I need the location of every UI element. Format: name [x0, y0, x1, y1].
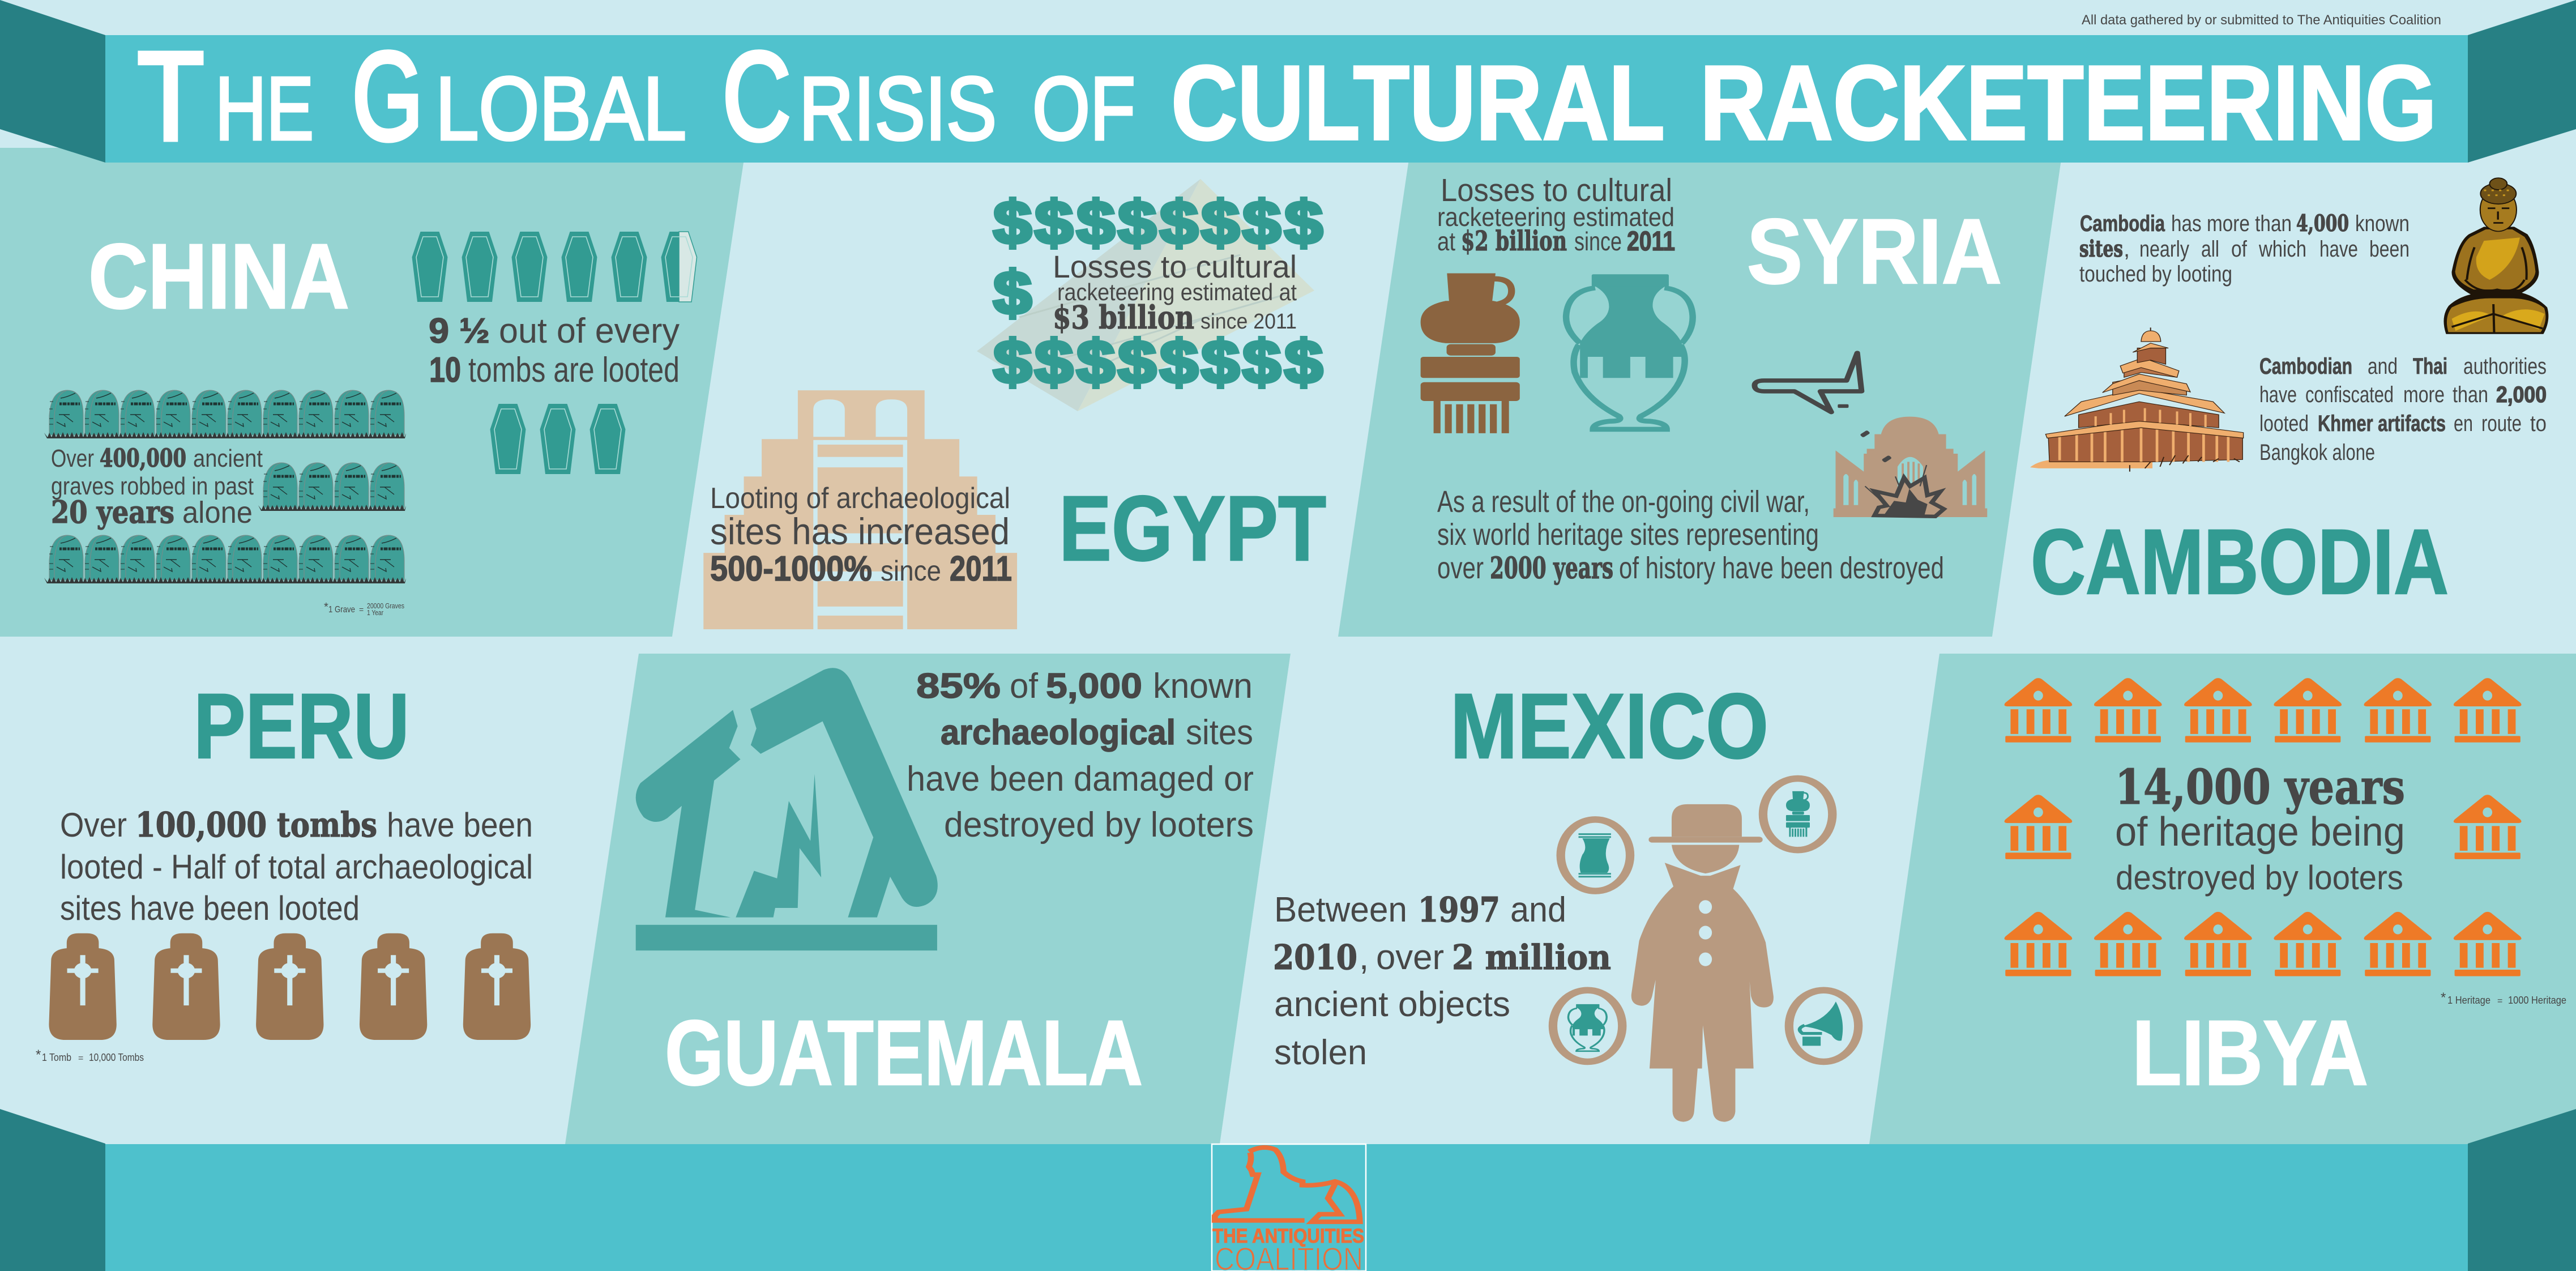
icon row: dollar signs top: $ — [1242, 188, 1281, 257]
text: cambodian confiscations: and — [2368, 354, 2398, 379]
icon: scroll in ring — [1561, 820, 1630, 891]
text: egypt looting: sites has increased — [710, 510, 1010, 552]
text: cambodia known sites: nearly — [2139, 237, 2189, 262]
footnote: heritage legend: 1 Heritage — [2447, 995, 2490, 1006]
text: libya heritage: 14,000 years — [2115, 759, 2405, 815]
panel: china — [0, 148, 746, 637]
text: peru tombs — [60, 805, 533, 927]
illustration: pyramid — [977, 179, 1314, 411]
icon row: dollar signs bottom — [993, 327, 1323, 396]
text: graves statistic: 400,000 — [100, 444, 186, 473]
footer band — [105, 1144, 2468, 1271]
icon: bombed building — [1834, 417, 1987, 517]
text: syria losses: racketeering estimated — [1437, 202, 1674, 232]
text: cambodia known sites: known — [2355, 211, 2410, 236]
text: tombs statistic — [429, 312, 680, 390]
footnote: tomb legend: * — [36, 1047, 41, 1063]
text: syria heritage sites: of history have been destroyed — [1619, 551, 1944, 585]
text: guatemala damage: archaeological — [941, 713, 1176, 752]
text: mexico stolen objects: and — [1510, 890, 1566, 929]
icon row: dollar signs bottom: $ — [1076, 327, 1115, 396]
icon row: dollar signs bottom: $ — [1118, 327, 1156, 396]
illustration: stepped temple — [703, 390, 1017, 629]
text: tombs statistic: 9 ½ — [429, 312, 490, 351]
text: cambodian confiscations: to — [2530, 411, 2547, 436]
banner right fold — [2468, 0, 2576, 163]
title — [138, 26, 2437, 166]
text: cambodian confiscations: Cambodian — [2259, 354, 2352, 379]
text: egypt looting: 500-1000% — [710, 549, 872, 588]
icon row: dollar signs bottom: $ — [1035, 327, 1073, 396]
text: guatemala damage: sites — [1186, 713, 1253, 752]
text: cambodia known sites: which — [2258, 237, 2306, 262]
heading: Cambodia: CAMBODIA — [2031, 510, 2449, 613]
icon row: dollar signs top: $ — [1160, 188, 1198, 257]
text: graves statistic: ancient — [193, 445, 263, 472]
text: syria losses: 2011 — [1627, 227, 1675, 257]
text: cambodia known sites — [2079, 210, 2410, 287]
text: mexico stolen objects — [1273, 890, 1611, 1072]
text: egypt looting — [710, 482, 1012, 588]
title: OF — [1032, 59, 1135, 159]
panel: syria — [1338, 148, 2063, 637]
text: guatemala damage: known — [1153, 667, 1253, 706]
text: syria heritage sites — [1437, 485, 1944, 586]
text: mexico stolen objects: ancient objects — [1274, 985, 1510, 1024]
banner left fold — [0, 0, 105, 163]
text: syria losses: $2 billion — [1461, 225, 1567, 257]
icon row: dollar signs top: $ — [1076, 188, 1115, 257]
text: cambodia known sites: , — [2124, 237, 2130, 262]
footnote: grave legend: * — [324, 601, 328, 613]
icon row: dollar signs bottom: $ — [1242, 327, 1281, 396]
illustration: khmer temple — [2030, 327, 2244, 472]
text: libya heritage — [2115, 759, 2405, 897]
text: syria losses: since — [1574, 227, 1622, 256]
text: graves statistic: 20 years — [51, 494, 174, 530]
text: cambodian confiscations: route — [2481, 411, 2522, 436]
icon: single dollar sign: $ — [993, 258, 1032, 327]
heading: China: CHINA — [88, 224, 349, 328]
footnote: heritage legend — [2441, 990, 2566, 1006]
header banner — [0, 0, 2576, 166]
footnote: tomb legend: 10,000 Tombs — [89, 1052, 144, 1063]
text: cambodia known sites: Cambodia — [2080, 211, 2165, 236]
footer right fold — [2468, 1109, 2576, 1271]
text: graves statistic: graves robbed in past — [51, 472, 254, 500]
icon row: dollar signs top: $ — [1118, 188, 1156, 257]
icon: brown jug on pedestal — [1421, 273, 1520, 433]
text: cambodia known sites: touched by looting — [2079, 262, 2232, 287]
text: egypt losses: since 2011 — [1201, 310, 1297, 334]
icon row: dollar signs bottom: $ — [1284, 327, 1323, 396]
banner band — [105, 35, 2468, 163]
title: RACKETEERING — [1700, 44, 2437, 162]
text: cambodian confiscations: en — [2454, 411, 2473, 436]
text: mexico stolen objects: 1997 — [1418, 890, 1500, 930]
icon row: dollar signs top: $ — [1201, 188, 1240, 257]
icon row: dollar signs bottom: $ — [1201, 327, 1240, 396]
text: syria losses: at — [1437, 227, 1455, 256]
text: peru tombs: have been — [387, 806, 533, 844]
text: mexico stolen objects: 2 million — [1452, 938, 1611, 978]
icon row: dollar signs top: $ — [993, 188, 1032, 257]
text: syria losses: Losses to cultural — [1441, 172, 1672, 208]
icon row: brown tombs — [49, 933, 531, 1040]
footer left fold — [0, 1109, 105, 1271]
text: egypt losses: racketeering estimated at — [1057, 279, 1297, 305]
text: syria heritage sites: six world heritage sites representing — [1437, 518, 1819, 552]
icon row: coffins bottom — [490, 404, 625, 474]
text: egypt looting: Looting of archaeological — [710, 482, 1010, 515]
heading: Libya: LIBYA — [2132, 1001, 2368, 1104]
title: RISIS — [799, 59, 997, 159]
text: tombs statistic: 10 — [429, 351, 461, 390]
footnote: heritage legend: * — [2441, 990, 2446, 1005]
title: LOBAL — [435, 59, 686, 159]
icon row: graves third row — [44, 535, 406, 583]
illustration: golden buddha — [2443, 178, 2548, 334]
text: egypt losses: Losses to cultural — [1053, 249, 1297, 284]
heading: Mexico: MEXICO — [1450, 674, 1768, 778]
text: tombs statistic: out of every — [499, 312, 680, 351]
icon row: dollar signs top — [993, 188, 1323, 257]
text: cambodian confiscations: have — [2259, 382, 2297, 407]
text: mexico stolen objects: , — [1359, 938, 1369, 977]
panel: egypt — [672, 148, 1411, 637]
text: guatemala damage: have been damaged or — [907, 760, 1254, 799]
footer banner — [0, 1109, 2576, 1271]
text: syria heritage sites: As a result of the on-going civil war, — [1437, 485, 1810, 519]
text: libya heritage: of heritage being — [2115, 809, 2405, 855]
footnote: tomb legend: = — [78, 1054, 83, 1063]
text: cambodian confiscations: Thai — [2413, 354, 2447, 379]
icon row: dollar signs top: $ — [1284, 188, 1323, 257]
icon: plane — [1754, 353, 1861, 412]
footnote: grave legend: 1 Grave — [328, 605, 355, 615]
text: guatemala damage — [907, 667, 1254, 845]
text: peru tombs: 100,000 tombs — [135, 805, 377, 845]
icon: amphora in ring — [1553, 990, 1622, 1061]
heading: Syria: SYRIA — [1747, 199, 2002, 303]
text: cambodia known sites: have — [2319, 237, 2358, 262]
text: tombs statistic: tombs are looted — [468, 351, 680, 390]
text: egypt looting: since — [881, 555, 941, 587]
text: cambodia known sites: sites — [2079, 236, 2123, 262]
text: cambodian confiscations: more — [2403, 382, 2445, 407]
icon row: coffins top — [412, 232, 697, 302]
footnote: tomb legend: 1 Tomb — [42, 1052, 71, 1063]
text: mexico stolen objects: over — [1376, 938, 1444, 977]
text: cambodia known sites: has more than — [2171, 211, 2292, 236]
icon row: graves first row — [44, 390, 406, 438]
icon: cracked house — [636, 668, 938, 950]
text: guatemala damage: 85% — [916, 667, 1001, 706]
text: guatemala damage: 5,000 — [1046, 667, 1142, 706]
panel: cambodia — [1992, 148, 2576, 637]
text: mexico stolen objects: stolen — [1274, 1033, 1367, 1072]
panel: mexico — [1220, 654, 1940, 1144]
text: cambodian confiscations: looted — [2259, 411, 2309, 436]
icon: teal amphora — [1566, 274, 1693, 429]
title: CULTURAL — [1171, 44, 1665, 162]
text: guatemala damage: destroyed by looters — [944, 805, 1254, 845]
footnote: heritage legend: = — [2497, 996, 2502, 1006]
icon row: dollar signs bottom: $ — [1160, 327, 1198, 396]
footnote: grave legend: = — [359, 605, 364, 614]
text: mexico stolen objects: 2010 — [1273, 938, 1357, 978]
text: egypt looting: 2011 — [950, 549, 1012, 588]
heading: Egypt: EGYPT — [1059, 476, 1326, 580]
footnote: heritage legend: 1000 Heritage — [2508, 995, 2566, 1006]
panel: guatemala — [565, 654, 1291, 1144]
icon row: dollar signs top: $ — [1035, 188, 1073, 257]
text: cambodian confiscations — [2259, 354, 2547, 465]
footnote: tomb legend — [36, 1047, 144, 1063]
panel: peru — [0, 654, 639, 1144]
text: graves statistic: alone — [182, 496, 253, 530]
text: syria heritage sites: over — [1437, 551, 1484, 585]
text: cambodia known sites: 4,000 — [2296, 210, 2349, 237]
title: T — [138, 26, 204, 166]
icon: jug in ring — [1763, 779, 1832, 850]
logo wordmark: THE ANTIQUITIES — [1212, 1225, 1364, 1247]
icon row: dollar signs bottom: $ — [993, 327, 1032, 396]
text: cambodian confiscations: 2,000 — [2496, 382, 2547, 407]
text: guatemala damage: of — [1010, 667, 1039, 706]
text: mexico stolen objects: Between — [1274, 890, 1407, 929]
icon: gramophone in ring — [1789, 990, 1859, 1061]
icon row: graves second row — [258, 463, 406, 511]
title: C — [723, 26, 791, 166]
text: cambodian confiscations: authorities — [2463, 354, 2547, 379]
panel: libya — [1869, 654, 2576, 1144]
logo sphinx — [1215, 1148, 1360, 1222]
text: cambodia known sites: of — [2231, 237, 2248, 262]
text: cambodia known sites: all — [2201, 237, 2219, 262]
text: syria losses — [1437, 172, 1675, 257]
text: egypt losses: $3 billion — [1053, 299, 1194, 336]
text: syria heritage sites: 2000 years — [1490, 551, 1613, 586]
text: cambodian confiscations: Khmer artifacts — [2318, 411, 2446, 436]
heading: Peru: PERU — [194, 674, 409, 778]
text: graves statistic: Over — [51, 445, 94, 472]
text: peru tombs: looted - Half of total archaeological — [60, 848, 533, 886]
text: cambodian confiscations: confiscated — [2305, 382, 2394, 407]
text: cambodian confiscations: than — [2453, 382, 2488, 407]
footnote: grave legend: 20000 Graves — [367, 602, 404, 610]
text: graves statistic — [51, 444, 263, 530]
title: G — [352, 26, 423, 166]
footnote: grave legend — [324, 601, 404, 617]
text: cambodian confiscations: Bangkok alone — [2259, 440, 2375, 465]
text: cambodia known sites: been — [2369, 237, 2410, 262]
footnote: grave legend: 1 Year — [367, 608, 384, 617]
illustration: looter in hat and coat — [1631, 804, 1774, 1122]
logo: The Antiquities Coalition — [1212, 1144, 1366, 1271]
text: libya heritage: destroyed by looters — [2116, 859, 2403, 897]
title: HE — [215, 59, 314, 159]
text: data source note: All data gathered by or submitted to The Antiquities Coalition — [2082, 12, 2441, 28]
heading: Guatemala: GUATEMALA — [665, 1001, 1143, 1104]
logo wordmark — [1212, 1225, 1364, 1271]
text: egypt losses — [1053, 249, 1297, 336]
text: peru tombs: Over — [60, 806, 127, 844]
icon grid: museums — [2005, 678, 2522, 976]
text: peru tombs: sites have been looted — [60, 889, 360, 927]
